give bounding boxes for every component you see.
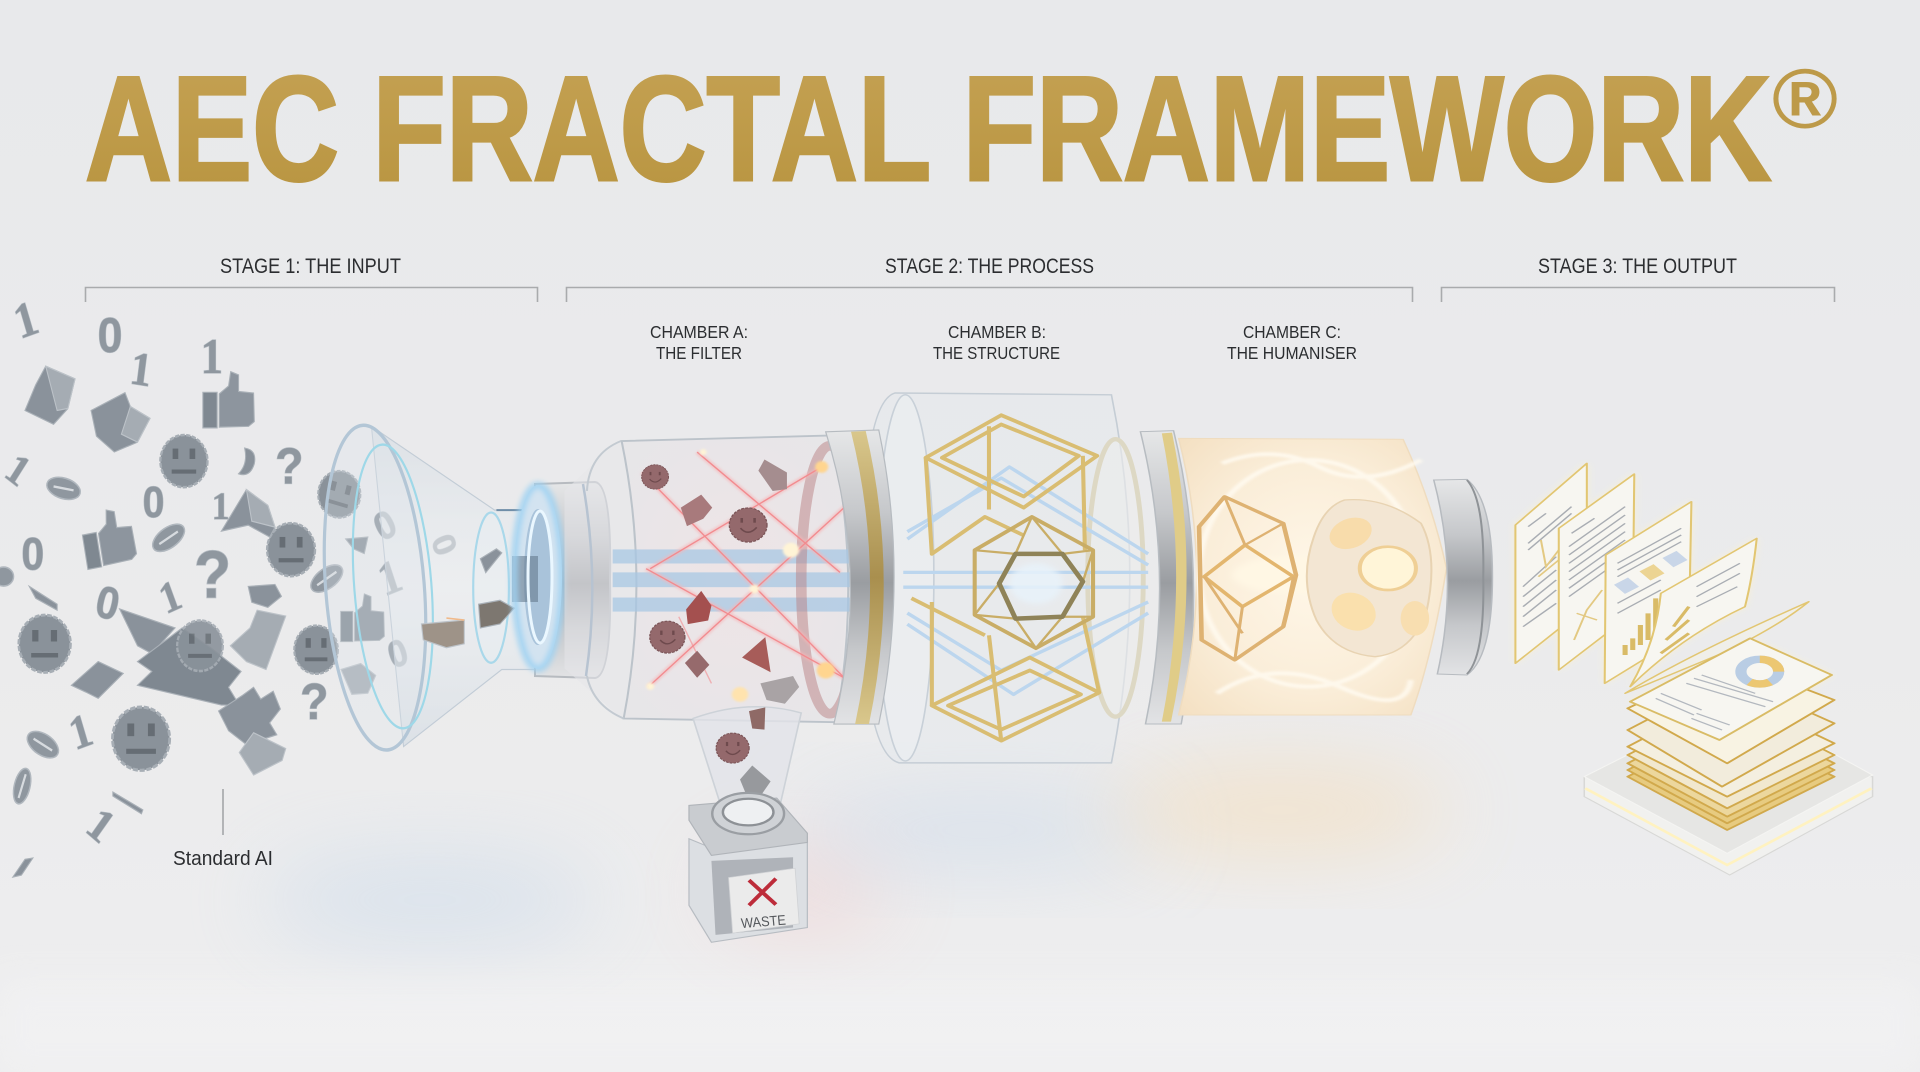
input data scatter: 0: [98, 307, 122, 362]
stage 1 heading and bracket: [86, 255, 538, 302]
stage 2 heading and bracket: [566, 255, 1412, 302]
turning page: [1625, 602, 1809, 693]
sparks: [646, 449, 835, 702]
input data scatter: 0: [366, 501, 403, 550]
chamber a label: THE FILTER: [656, 343, 742, 363]
chamber b label: [933, 322, 1060, 363]
central hexagon: [975, 517, 1093, 648]
input data scatter: 0: [424, 529, 464, 561]
chamber c label: CHAMBER C:: [1243, 322, 1341, 342]
waste chute and bin: [689, 707, 807, 942]
top document with donut chart: [1630, 638, 1832, 740]
stage 3 heading and bracket: [1442, 255, 1834, 302]
chamber c: the humaniser: [1179, 438, 1492, 715]
floating page 3: [1605, 502, 1691, 683]
chamber b label: CHAMBER B:: [948, 322, 1046, 342]
input data scatter: 1: [212, 485, 230, 529]
input funnel: [313, 421, 537, 755]
chamber c label: THE HUMANISER: [1227, 343, 1357, 363]
input data scatter: 1: [153, 570, 187, 623]
chamber b label: THE STRUCTURE: [933, 343, 1060, 363]
standard ai callout: [173, 789, 273, 870]
input data scatter: 0: [21, 530, 44, 580]
input data scatter: 1: [8, 291, 44, 350]
metal connector with blue ring: [512, 482, 610, 678]
platform: [1584, 748, 1873, 875]
input data scatter: 0: [383, 630, 413, 677]
standard ai callout: Standard AI: [173, 848, 273, 870]
chamber c label: [1227, 322, 1357, 363]
title: ®: [1772, 52, 1838, 146]
output documents: [1515, 463, 1832, 740]
chamber a label: CHAMBER A:: [650, 322, 748, 342]
input data scatter: 1: [201, 330, 223, 384]
stage 3 heading and bracket: STAGE 3: THE OUTPUT: [1538, 255, 1737, 278]
waste bin: [689, 793, 807, 942]
stage 2 heading and bracket: STAGE 2: THE PROCESS: [885, 255, 1094, 278]
floating page 1: [1515, 463, 1587, 663]
smooth organic form: [1307, 500, 1431, 657]
outlet connector: [1434, 479, 1492, 675]
document stack on platform: [1584, 638, 1873, 875]
input data scatter: 1: [127, 342, 155, 397]
wireframe solid: [1199, 497, 1296, 660]
chamber b: the structure: [862, 393, 1148, 763]
floating page 4: [1630, 538, 1757, 687]
chamber a: the filter: [564, 435, 858, 722]
input data scatter: 0: [91, 576, 124, 631]
input data scatter: [0, 291, 464, 877]
input data scatter: 1: [372, 549, 408, 606]
blue lattice: [903, 467, 1148, 694]
input data scatter: 0: [143, 477, 164, 527]
stage 1 heading and bracket: STAGE 1: THE INPUT: [220, 255, 401, 278]
waste bin: WASTE: [740, 913, 787, 932]
chamber a label: [650, 322, 748, 363]
page layers: [1628, 660, 1834, 830]
red lasers: [642, 452, 846, 687]
blue tubes: [613, 549, 858, 612]
collar between chamber a and b: [826, 430, 894, 724]
input data scatter: 1: [63, 703, 98, 760]
input data scatter: 1: [78, 797, 124, 853]
collar between chamber b and c: [1140, 431, 1194, 724]
floating page 2: [1559, 474, 1634, 670]
gold wireframe: [911, 415, 1099, 741]
filtered items: [642, 460, 799, 704]
